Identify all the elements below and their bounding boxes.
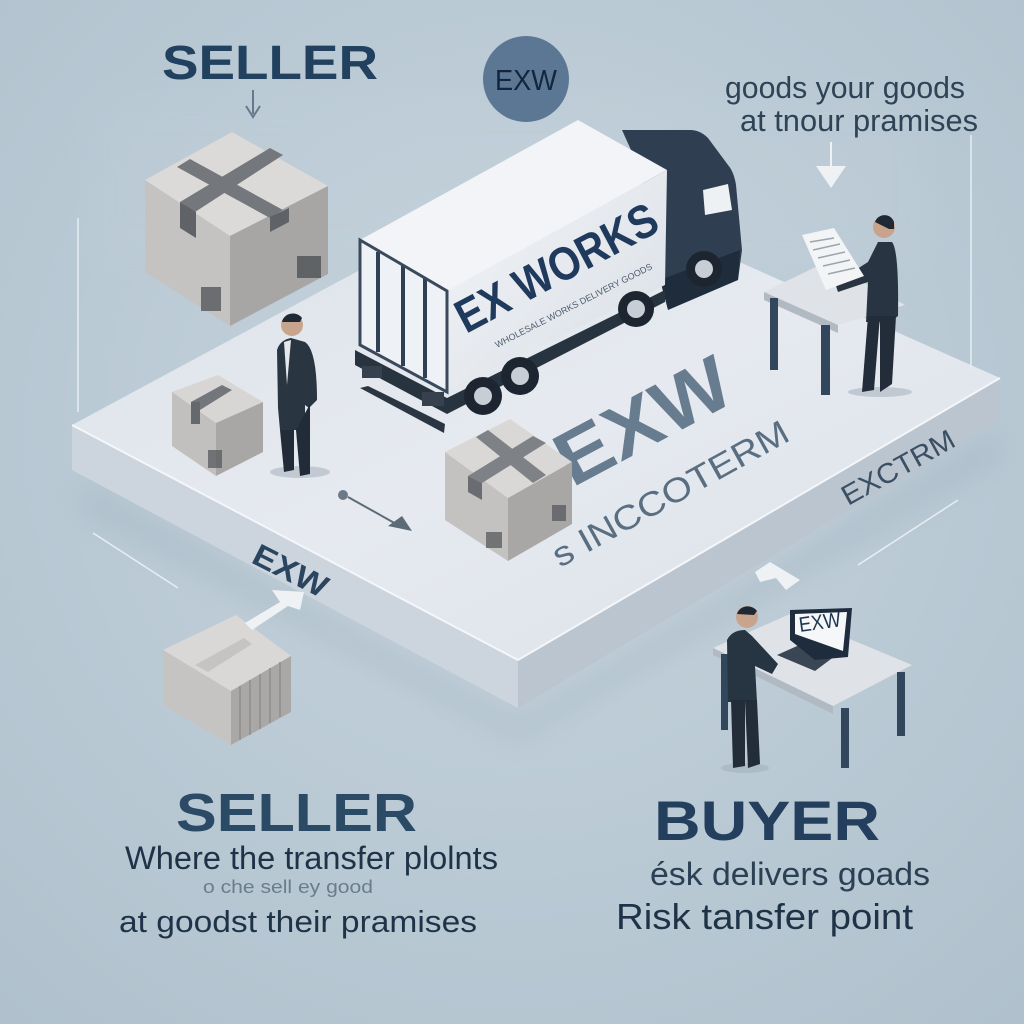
badge: EXW — [483, 36, 569, 122]
person — [721, 763, 769, 773]
box: bottom left — [163, 615, 291, 745]
text: goods your goods — [725, 70, 978, 138]
chassis and wheels — [355, 290, 665, 433]
text: seller caption: Where the transfer plolnts — [125, 840, 498, 876]
text: buyer caption: ésk delivers goads — [650, 856, 930, 892]
cab — [622, 130, 742, 310]
truck — [355, 120, 742, 433]
arrow: down from seller — [246, 90, 260, 117]
arrow on platform — [338, 490, 412, 531]
decorative line left — [93, 533, 178, 588]
platform label: EXW left edge: EXW — [247, 537, 335, 605]
text: goods your goods: at tnour pramises — [740, 103, 978, 138]
heading: BUYER: BUYER — [654, 789, 880, 852]
document — [802, 228, 864, 290]
title: SELLER top: SELLER — [162, 37, 378, 90]
small box on platform — [172, 375, 263, 476]
large box: seller — [145, 132, 328, 326]
platform — [72, 200, 1000, 708]
text: seller caption — [119, 840, 498, 939]
centre box on platform — [445, 419, 572, 561]
text: goods your goods: goods your goods — [725, 70, 965, 105]
cargo box — [360, 120, 667, 392]
heading: SELLER bottom: SELLER — [176, 783, 417, 843]
laptop text: EXW: EXW — [797, 608, 842, 637]
arrow: down from top right text — [816, 142, 846, 188]
platform label: INCOTERM: s INCCOTERM — [545, 413, 796, 575]
platform label: EXW large: EXW — [540, 340, 746, 503]
person — [873, 216, 895, 238]
person: seller on platform — [270, 314, 330, 478]
text: seller caption: o che sell ey good — [203, 877, 373, 897]
text: buyer caption — [616, 856, 930, 937]
laptop — [777, 638, 843, 671]
truck small text: WHOLESALE WORKS DELIVERY GOODS — [493, 261, 654, 350]
badge: EXW: EXW — [495, 65, 558, 97]
arrow: bottom right — [755, 562, 800, 590]
platform label: EXCTRM right edge: EXCTRM — [836, 424, 960, 511]
text: buyer caption: Risk tansfer point — [616, 896, 913, 937]
table and person: top right — [764, 215, 912, 397]
text: seller caption: at goodst their pramises — [119, 904, 477, 939]
table and person: bottom right — [713, 606, 912, 773]
truck text: EX WORKS: EX WORKS — [446, 192, 667, 343]
arrow: bottom left box — [245, 590, 304, 630]
